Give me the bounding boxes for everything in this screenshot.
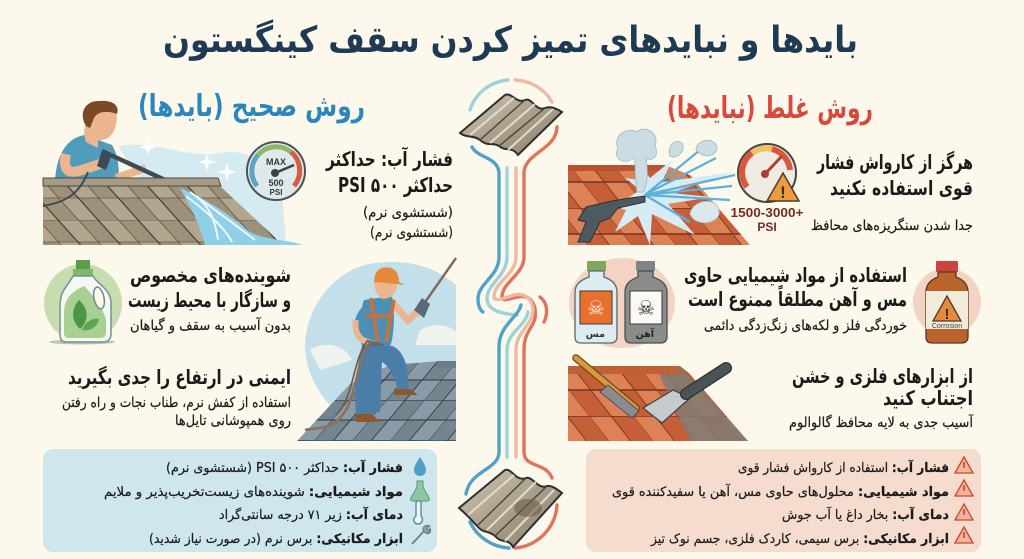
panel: do summary	[43, 449, 437, 552]
icon: danger gauge	[738, 144, 799, 202]
text: no chemicals tip	[684, 263, 907, 334]
text: don't summary rows	[612, 459, 949, 547]
icon: copper and iron chemical bottles	[569, 258, 675, 348]
text: water pressure tip: (شستشوی نرم)	[363, 205, 453, 221]
text: no high pressure tip: جدا شدن سنگریزه‌های محافظ	[811, 217, 973, 234]
text: don't summary rows: فشار آب: استفاده از کارواش فشار قوی	[738, 459, 949, 476]
text: height safety tip: ایمنی در ارتفاع را جدی بگیرید	[68, 365, 291, 389]
icon: eco detergent bottle	[44, 260, 122, 344]
icon: bottom roof tile	[459, 470, 562, 547]
text: eco detergent tip: و سازگار با محیط زیست	[128, 288, 291, 312]
icon: copper and iron chemical bottles: آهن	[636, 327, 655, 340]
label: psi range: 1500-3000+	[730, 205, 804, 220]
icon: copper and iron chemical bottles: ☠	[587, 298, 605, 320]
text: height safety tip: روی همپوشانی تایل‌ها	[175, 413, 291, 429]
icon: pressure gauge 500 PSI: 500	[268, 178, 284, 188]
icon: pressure gauge 500 PSI	[247, 142, 305, 200]
icon: corrosion bottle	[913, 261, 981, 343]
center connector	[466, 80, 557, 548]
text: eco detergent tip: شوینده‌های مخصوص	[130, 263, 291, 287]
icon: wrench	[412, 526, 430, 544]
text: do summary rows: مواد شیمیایی: شوینده‌های زیست‌تخریب‌پذیر و ملایم	[104, 485, 403, 500]
illustration: man washing roof	[43, 101, 303, 245]
illustration: high pressure spray on tiles	[568, 129, 750, 245]
heading: don't: روش غلط (نبایدها)	[667, 91, 873, 126]
text: water pressure tip: حداکثر ۵۰۰ PSI	[338, 173, 453, 197]
text: eco detergent tip	[128, 263, 291, 334]
text: water pressure tip: (شستشوی نرم)	[370, 225, 453, 241]
icon: flask	[411, 481, 429, 501]
icon: pressure gauge 500 PSI: MAX	[266, 157, 286, 167]
text: eco detergent tip: بدون آسیب به سقف و گیاهان	[130, 317, 291, 334]
text: no chemicals tip: مس و آهن مطلقاً ممنوع است	[688, 285, 907, 311]
text: no metal tools tip	[789, 364, 974, 431]
heading: do: روش صحیح (بایدها)	[138, 89, 365, 124]
icon: corrosion bottle: Corrosion	[932, 323, 962, 330]
text: no high pressure tip: قوی استفاده نکنید	[830, 176, 973, 200]
icon: danger gauge: !	[780, 183, 786, 202]
text: don't summary rows: ابزار مکانیکی: برس سیمی، کاردک فلزی، جسم نوک تیز	[650, 532, 949, 547]
title: بایدها و نبایدهای تمیز کردن سقف کینگستون	[163, 19, 858, 61]
illustration: wire brush and scraper on tiles	[568, 358, 748, 441]
icon: pressure gauge 500 PSI: PSI	[270, 188, 282, 197]
text: no chemicals tip: استفاده از مواد شیمیایی حاوی	[684, 263, 907, 287]
text: do summary rows: ابزار مکانیکی: برس نرم (در صورت نیاز شدید)	[149, 532, 403, 547]
icon: warning triangles	[955, 457, 973, 543]
text: do summary rows: دمای آب: زیر ۷۱ درجه سانتی‌گراد	[219, 506, 403, 523]
text: don't summary rows: مواد شیمیایی: محلول‌های حاوی مس، آهن یا سفیدکننده قوی	[612, 483, 949, 500]
text: no high pressure tip	[811, 150, 973, 234]
text: water pressure tip	[325, 146, 453, 241]
icon: copper and iron chemical bottles: مس	[586, 329, 605, 340]
panel: don't summary	[586, 449, 981, 552]
text: height safety tip	[62, 365, 291, 429]
illustration: roofer with safety harness	[297, 258, 456, 441]
icon: copper and iron chemical bottles: ☠	[637, 298, 655, 320]
text: no metal tools tip: آسیب جدی به لایه محافظ گالوالوم	[789, 414, 974, 431]
icon: water drop	[414, 457, 426, 476]
text: do summary rows: فشار آب: حداکثر ۵۰۰ PSI (شستشوی نرم)	[166, 459, 403, 476]
label: psi range	[730, 205, 804, 234]
text: water pressure tip: فشار آب: حداکثر	[325, 146, 453, 171]
text: no chemicals tip: خوردگی فلز و لکه‌های زنگ‌زدگی دائمی	[704, 317, 907, 334]
text: height safety tip: استفاده از کفش نرم، طناب نجات و راه رفتن	[62, 395, 291, 411]
icon: thermometer	[414, 501, 422, 524]
text: do summary rows	[104, 459, 403, 547]
text: no metal tools tip: اجتناب کنید	[883, 386, 973, 410]
text: don't summary rows: دمای آب: بخار داغ یا آب جوش	[782, 506, 949, 523]
icon: corrosion bottle: !	[944, 306, 950, 323]
label: psi range: PSI	[757, 220, 777, 234]
icon: top roof tile	[460, 95, 562, 155]
